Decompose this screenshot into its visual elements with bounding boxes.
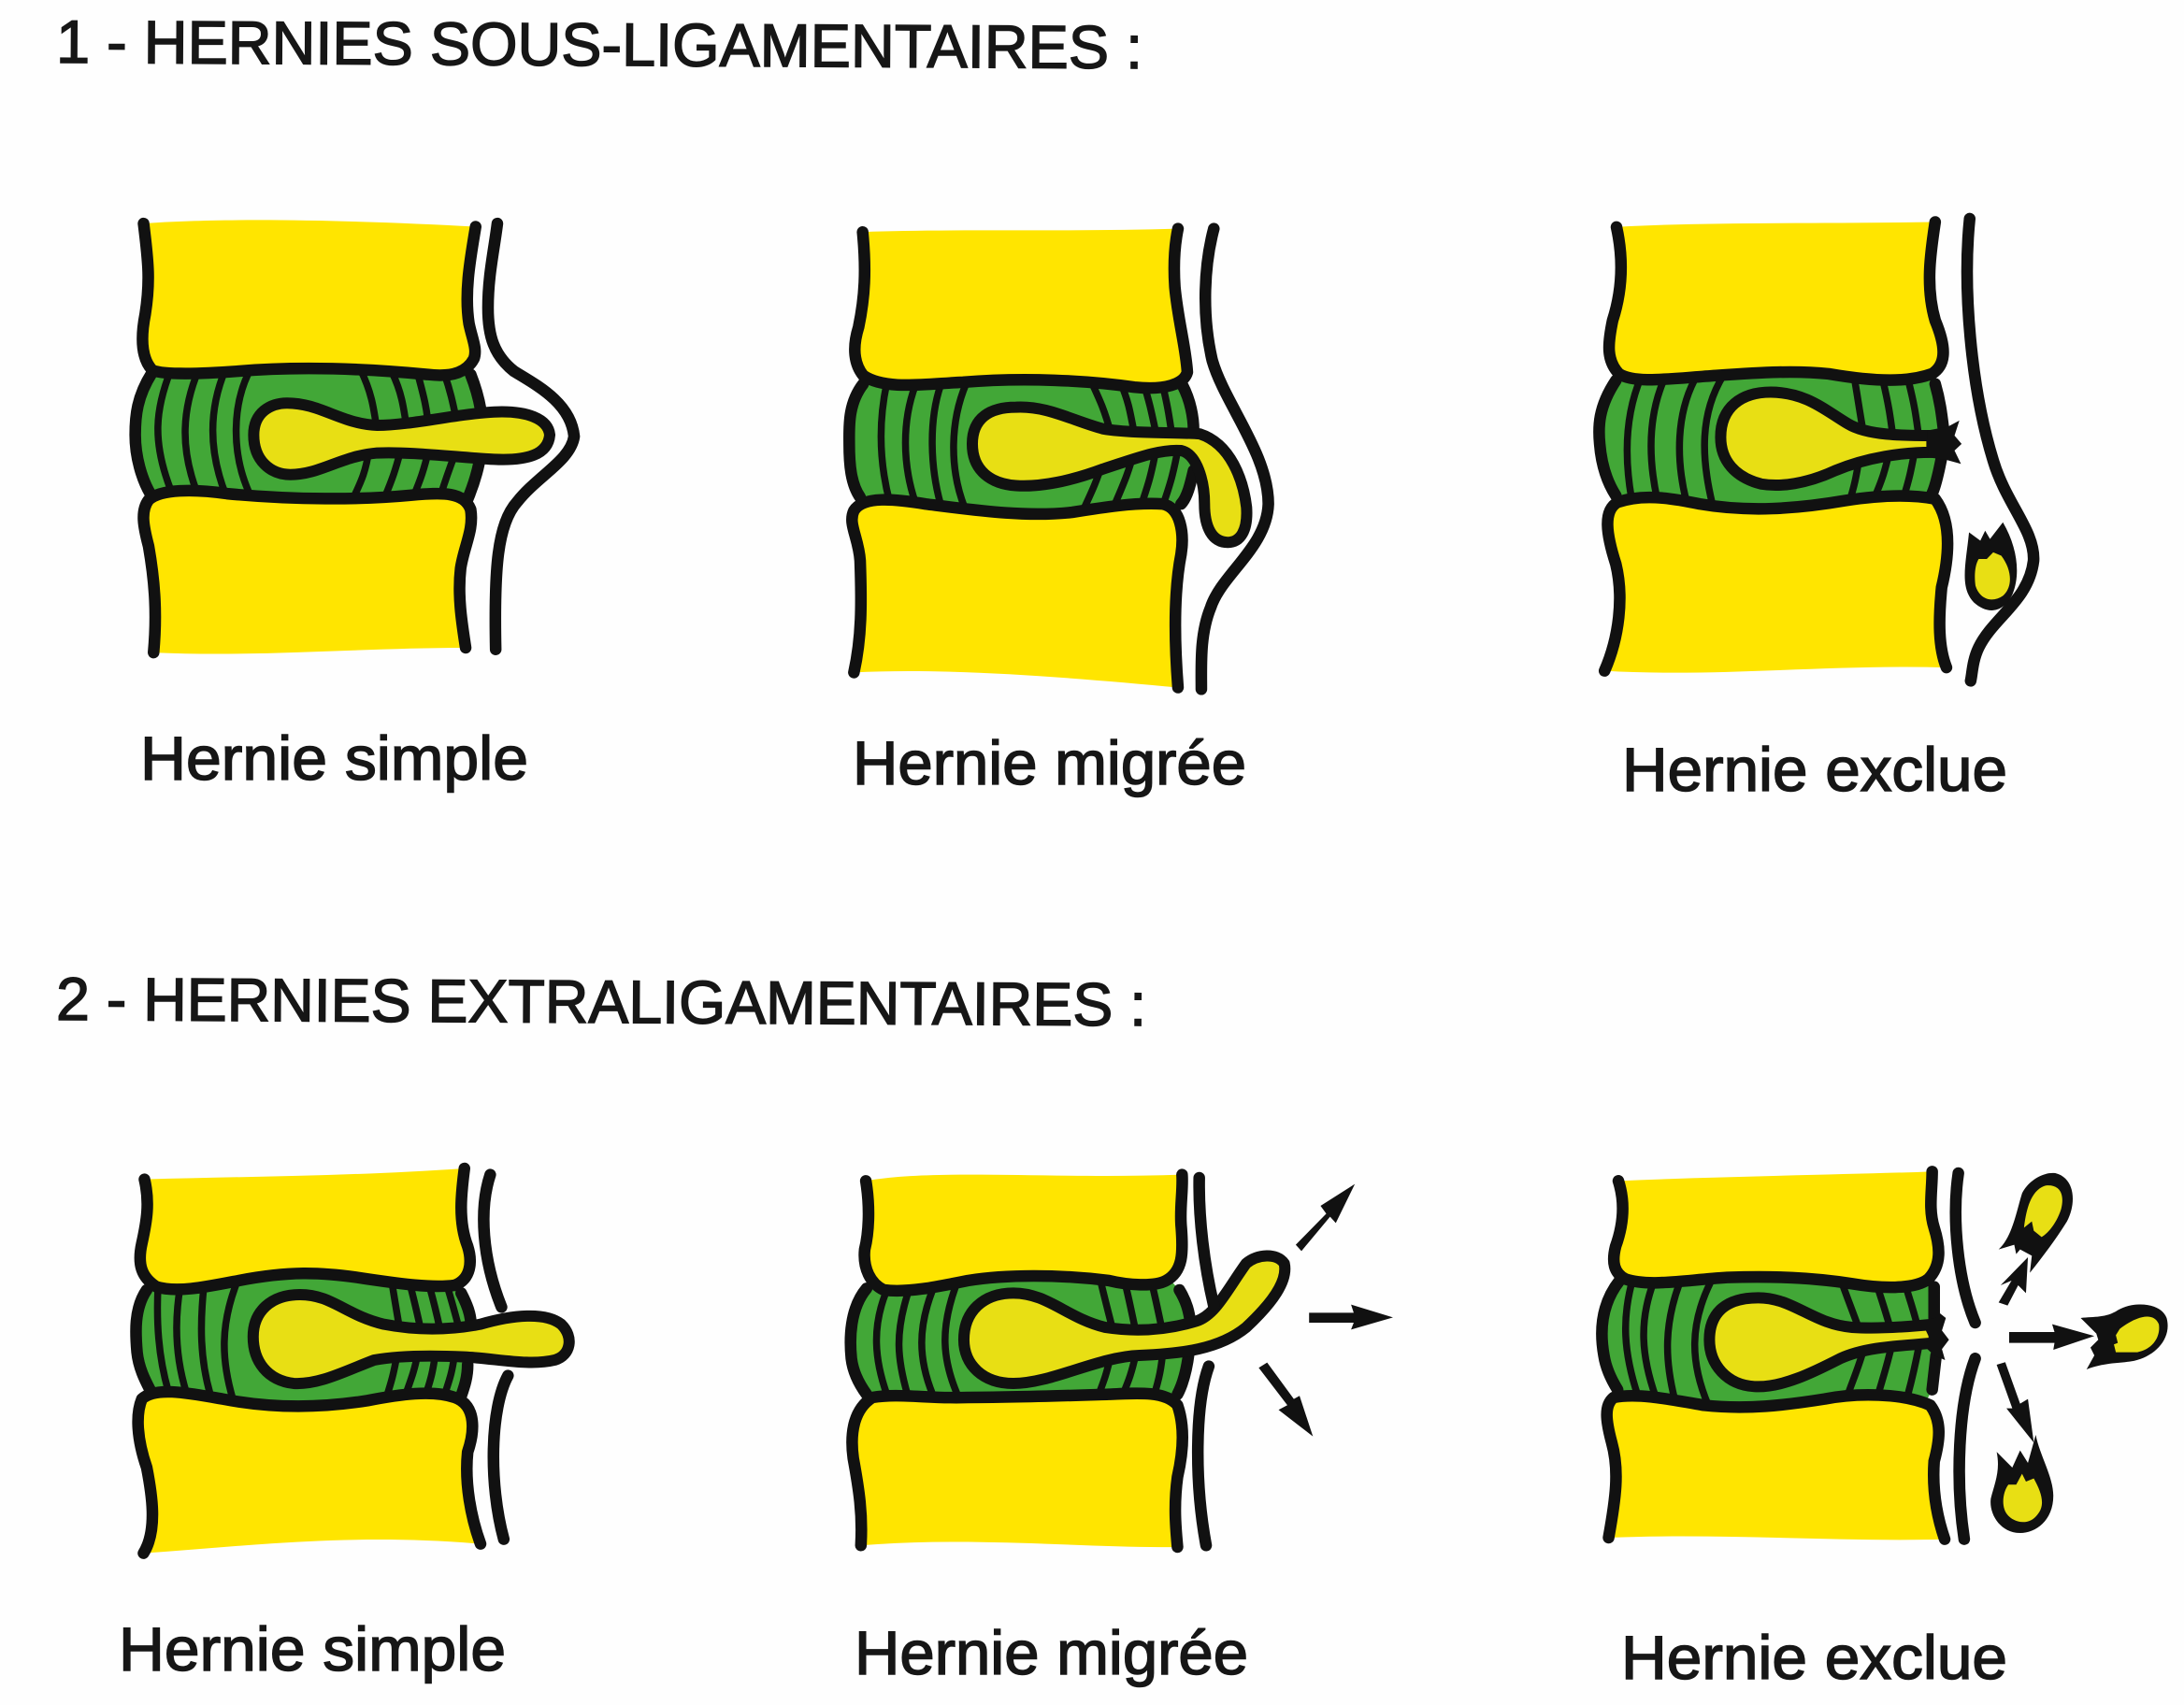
figure: extra-ligament migrated hernia [851, 1175, 1393, 1547]
top vertebra [865, 1175, 1183, 1291]
fragment: right [2080, 1304, 2168, 1369]
bottom vertebra [1607, 1395, 1945, 1540]
arrow: down [1997, 1362, 2033, 1442]
frayed rupture point [1927, 421, 1961, 464]
herniated nucleus [253, 403, 550, 475]
arrow: right [1309, 1305, 1393, 1329]
outlines of vertebrae and disc [1599, 222, 1947, 671]
nucleus with torn end [1709, 1297, 1934, 1386]
excluded fragment [1965, 523, 2017, 610]
posterior ligament [1201, 229, 1269, 689]
figure: sub-ligament excluded hernia [1599, 219, 2033, 681]
torn ligament [1956, 1173, 1976, 1540]
posterior ligament [488, 223, 574, 650]
label: Hernie migrée: Hernie migrée [855, 1618, 1248, 1687]
herniated nucleus [253, 1295, 569, 1383]
arrow: down-right [1258, 1363, 1313, 1437]
torn ligament [483, 1175, 508, 1540]
bottom vertebra [852, 500, 1182, 688]
figure: extra-ligament excluded hernia [1602, 1171, 2168, 1540]
fragment: top [1999, 1173, 2073, 1273]
top vertebra [142, 220, 476, 375]
arrow: up-right [1296, 1184, 1355, 1251]
outlines of vertebrae and disc [136, 1168, 481, 1554]
label: Hernie migrée: Hernie migrée [853, 728, 1246, 797]
outlines of vertebrae and disc [851, 1175, 1191, 1547]
torn ligament [1198, 1178, 1214, 1545]
label: Hernie simple: Hernie simple [140, 724, 528, 793]
top vertebra [140, 1168, 470, 1289]
outlines of vertebrae and disc [1602, 1171, 1945, 1540]
figure: sub-ligament simple hernia [136, 220, 574, 654]
label: Hernie simple: Hernie simple [119, 1614, 506, 1684]
bottom vertebra [852, 1394, 1183, 1547]
frayed rupture point [1922, 1313, 1949, 1360]
migrated nucleus [972, 407, 1246, 542]
arrow: right [2009, 1325, 2094, 1350]
fragment: bottom [1990, 1435, 2053, 1533]
bottom vertebra [143, 491, 471, 654]
top vertebra [1609, 222, 1943, 380]
top vertebra [855, 229, 1187, 388]
label: Hernie exclue: Hernie exclue [1622, 735, 2007, 804]
figure: extra-ligament simple hernia [136, 1168, 569, 1554]
label: Hernie exclue: Hernie exclue [1621, 1623, 2007, 1692]
bottom vertebra [138, 1392, 481, 1554]
title: section 2: 2 - HERNIES EXTRALIGAMENTAIRES : [56, 965, 1146, 1039]
outlines of vertebrae and disc [136, 223, 481, 652]
figure: sub-ligament migrated hernia [849, 229, 1269, 689]
migrated nucleus [964, 1256, 1285, 1383]
bottom vertebra [1604, 496, 1947, 673]
nucleus with torn end [1720, 393, 1932, 485]
top vertebra [1614, 1171, 1939, 1287]
outlines of vertebrae and disc [849, 229, 1194, 688]
posterior ligament [1967, 219, 2033, 681]
arrow: up [1999, 1257, 2028, 1306]
title: section 1: 1 - HERNIES SOUS-LIGAMENTAIRES : [56, 7, 1142, 81]
